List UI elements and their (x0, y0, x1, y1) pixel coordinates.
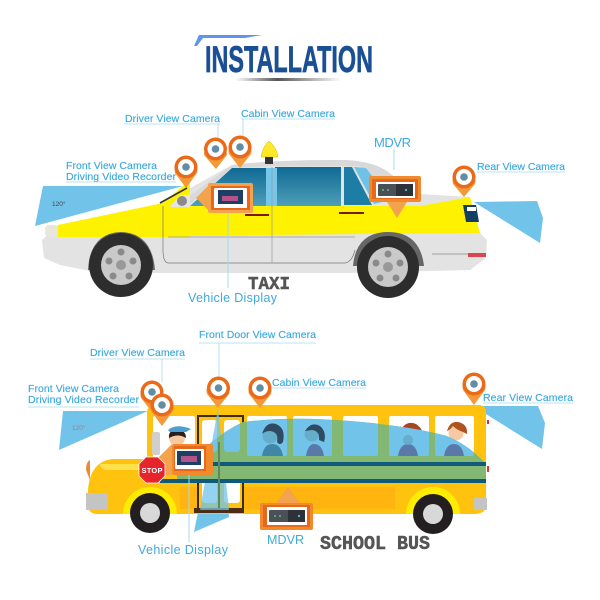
door handles (245, 214, 269, 216)
rear wheel (406, 487, 460, 534)
taillight (463, 205, 479, 222)
bus body (86, 405, 490, 514)
label: driver view camera: Driver View Camera (125, 113, 220, 125)
rear camera view cone (474, 201, 543, 243)
pin: rear camera (452, 166, 476, 197)
passengers (262, 422, 467, 456)
label: front door view camera (199, 329, 316, 377)
pin: driver camera (204, 138, 227, 169)
stop sign: STOP (142, 466, 162, 475)
rear camera view cone (473, 406, 545, 449)
mirror and wiper (170, 195, 190, 207)
label: front view camera: Front View Camera (28, 383, 119, 395)
pin: cabin camera (228, 136, 252, 168)
label: vehicle display: Vehicle Display (188, 291, 278, 305)
front camera view cone (35, 186, 183, 226)
driver (168, 426, 191, 446)
label: driver view camera (124, 113, 220, 138)
label: mdvr: MDVR (267, 533, 304, 547)
label: mdvr (374, 135, 411, 170)
label: front view camera (66, 160, 176, 183)
taxi body (42, 141, 487, 273)
pin: driver camera (140, 380, 164, 412)
windows (153, 416, 474, 458)
label: driver view camera: Driver View Camera (90, 347, 185, 359)
door (198, 416, 243, 511)
label: cabin view camera: Cabin View Camera (241, 108, 335, 120)
title (194, 35, 373, 81)
label: cabin view camera (241, 108, 335, 136)
door post (218, 442, 220, 508)
callout: mdvr (260, 487, 313, 530)
pin: door camera (206, 376, 230, 408)
label: front view camera: Driving Video Recorder (28, 394, 140, 406)
roof light (261, 141, 278, 157)
bumpers (86, 493, 108, 510)
door cone overlay (200, 408, 229, 510)
callout: vehicle display (196, 183, 253, 288)
label: rear view camera: Rear View Camera (477, 161, 565, 173)
front wheel (123, 487, 177, 533)
pin: cabin camera (248, 376, 272, 408)
label: school bus: SCHOOL BUS (320, 533, 430, 555)
label: mdvr: MDVR (374, 135, 411, 150)
label: taxi: TAXI (248, 275, 290, 295)
panel: school bus (28, 329, 573, 557)
title: INSTALLATION (205, 39, 373, 80)
label: front view camera (28, 383, 140, 407)
callout: vehicle display (153, 444, 213, 542)
door camera cone (194, 408, 229, 532)
label: front door view camera: Front Door View Camera (199, 329, 316, 341)
pin: front camera (150, 394, 174, 426)
label: vehicle display: Vehicle Display (138, 543, 229, 557)
label: cabin view camera: Cabin View Camera (272, 377, 366, 389)
label: front view camera: Front View Camera (66, 160, 157, 172)
label: front view camera: Driving Video Recorder (66, 171, 176, 183)
front camera view cone (59, 411, 148, 450)
label: rear view camera: Rear View Camera (483, 392, 573, 404)
mirror (152, 432, 160, 455)
label: driver view camera (90, 347, 185, 382)
front wheel (88, 232, 155, 297)
angle label: 120° (52, 200, 66, 208)
headlight (45, 225, 58, 237)
stop sign (139, 457, 165, 483)
band (160, 479, 486, 483)
rear wheel (353, 232, 424, 298)
callout: mdvr (369, 176, 421, 218)
pin: front camera (174, 156, 198, 188)
pin: rear camera (462, 372, 486, 405)
cabin cone overlay (177, 418, 486, 479)
angle label: 120° (72, 424, 86, 432)
panel: taxi (35, 108, 565, 305)
